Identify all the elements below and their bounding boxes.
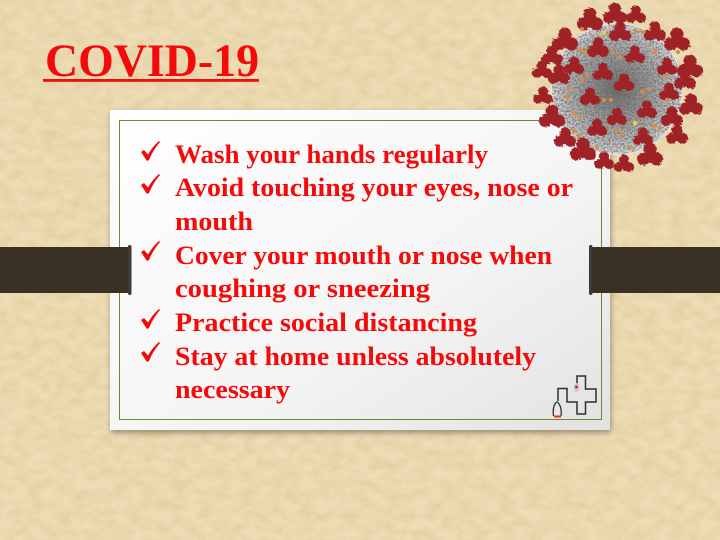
panel: prevention tips bbox=[110, 110, 611, 433]
icon: check marks bbox=[141, 141, 160, 362]
tip list text: mouth bbox=[175, 207, 254, 236]
tip list text bbox=[175, 140, 573, 404]
tip list text: Cover your mouth or nose when bbox=[175, 241, 553, 270]
title: COVID-19 bbox=[45, 35, 259, 87]
virus orange proteins bbox=[565, 27, 680, 150]
tip list text: coughing or sneezing bbox=[175, 274, 430, 303]
virus spikes bbox=[532, 3, 703, 172]
tip list text: necessary bbox=[175, 375, 290, 404]
icon: coronavirus illustration bbox=[532, 3, 703, 172]
virus yellow proteins bbox=[602, 31, 637, 125]
right dark band bbox=[589, 245, 720, 295]
tip list text: Practice social distancing bbox=[175, 308, 477, 337]
tip list text: Avoid touching your eyes, nose or bbox=[175, 173, 573, 202]
tip list text: Stay at home unless absolutely bbox=[175, 342, 536, 371]
icon: medical cross with stethoscope bbox=[553, 376, 596, 418]
left dark band bbox=[0, 245, 132, 295]
tip list text: Wash your hands regularly bbox=[175, 140, 488, 169]
virus body bbox=[551, 23, 683, 155]
